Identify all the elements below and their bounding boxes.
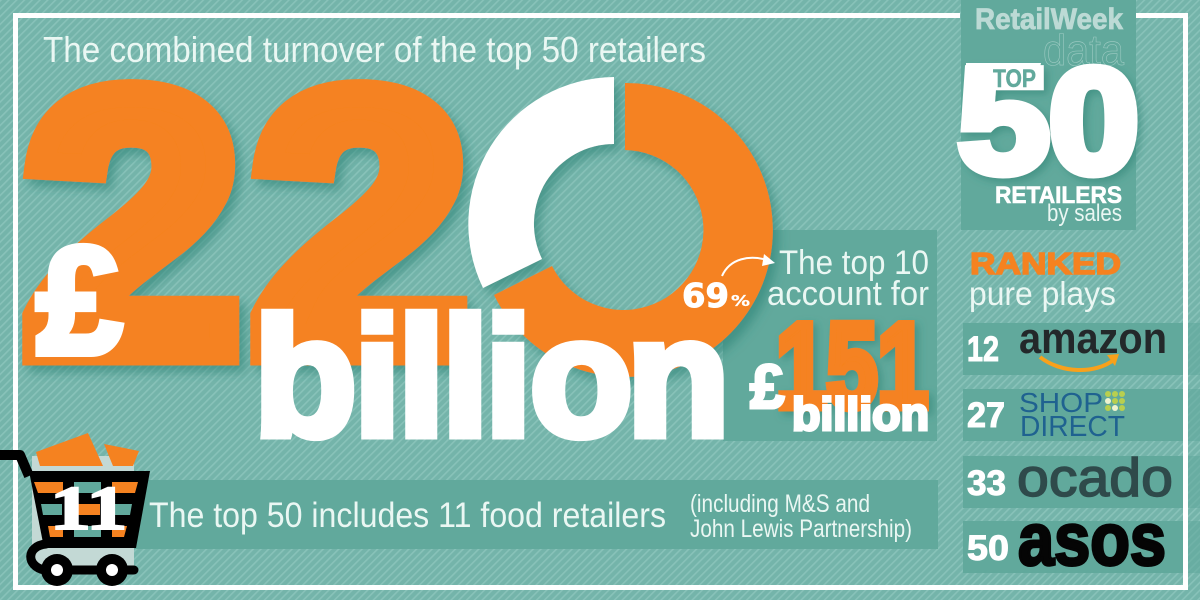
text: the top 10 account for	[767, 244, 929, 313]
row: amazon rank 12: 12	[967, 330, 999, 369]
logo: data: data	[1043, 26, 1124, 75]
donut chart: 69 percent share	[468, 77, 773, 377]
panel: food retailers	[134, 480, 938, 549]
logo: amazon: amazon	[1019, 314, 1167, 363]
tag: top	[966, 63, 1041, 93]
text: by sales: by sales	[1047, 200, 1122, 227]
row: shop direct rank 27: 27	[967, 396, 1005, 435]
heading: ranked: RANKED	[970, 246, 1121, 281]
pound sign: £	[37, 216, 122, 386]
text: food retailers: The top 50 includes 11 food retailers	[149, 496, 666, 535]
text: the top 10 account for: account for	[767, 275, 929, 313]
label: 69 percent: 69	[682, 276, 729, 315]
big figure: 50: 5	[958, 39, 1049, 204]
logo: ocado: ocado	[1017, 448, 1173, 508]
row: ocado rank 33: 33	[967, 464, 1006, 503]
big figure: 50: 0	[1049, 38, 1139, 204]
text: retailers: RETAILERS	[995, 182, 1122, 209]
small word: billion: billion	[792, 388, 929, 440]
text: including M&S and John Lewis Partnership	[690, 490, 912, 543]
big figure: 50	[958, 38, 1139, 204]
row: shop direct rank 27	[963, 387, 1200, 443]
small pound sign: £	[750, 353, 784, 422]
big word: billion: billion	[254, 283, 730, 471]
label: 69 percent: %	[731, 292, 750, 310]
big figure: 22: 2	[252, 16, 468, 430]
logo: Retail Week: RetailWeek	[975, 3, 1123, 36]
tag: top: TOP	[993, 65, 1036, 93]
text: including M&S and John Lewis Partnership: (including M&S and	[690, 490, 870, 518]
panel: top 10 account	[723, 230, 937, 441]
big figure: 22: 2	[24, 16, 240, 430]
logo: shop direct	[1019, 387, 1125, 443]
row: amazon rank 12	[963, 314, 1200, 375]
icon: shopping cart with 11	[0, 433, 150, 586]
logo: asos: asos	[1018, 498, 1166, 581]
headline: combined turnover: The combined turnover of the top 50 retailers	[43, 29, 706, 70]
logo: shop direct: DIRECT	[1020, 411, 1125, 443]
arrow: share to top 10	[722, 254, 775, 276]
big figure: 22	[24, 16, 468, 430]
figure: 151: 151	[776, 299, 928, 433]
subheading: pure plays: pure plays	[969, 275, 1116, 312]
text: the top 10 account for: The top 10	[779, 244, 929, 282]
logo: shop direct: SHOP	[1019, 387, 1103, 418]
icon: shopping cart with 11: 11	[50, 473, 127, 543]
row: asos rank 50: 50	[967, 529, 1009, 568]
label: 69 percent	[682, 276, 750, 315]
panel: Retail Week top 50 badge	[958, 0, 1139, 230]
row: ocado rank 33	[963, 448, 1200, 508]
row: asos rank 50	[963, 498, 1200, 581]
text: including M&S and John Lewis Partnership: John Lewis Partnership)	[690, 515, 912, 543]
